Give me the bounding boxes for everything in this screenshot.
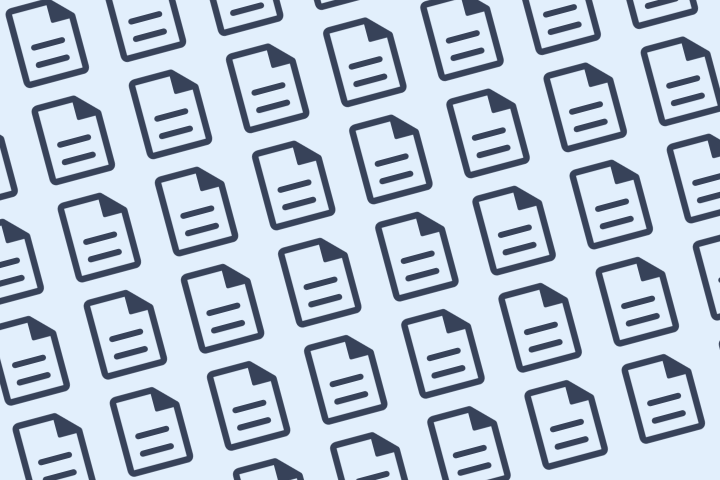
empty bottom-right corner bbox=[570, 450, 720, 480]
